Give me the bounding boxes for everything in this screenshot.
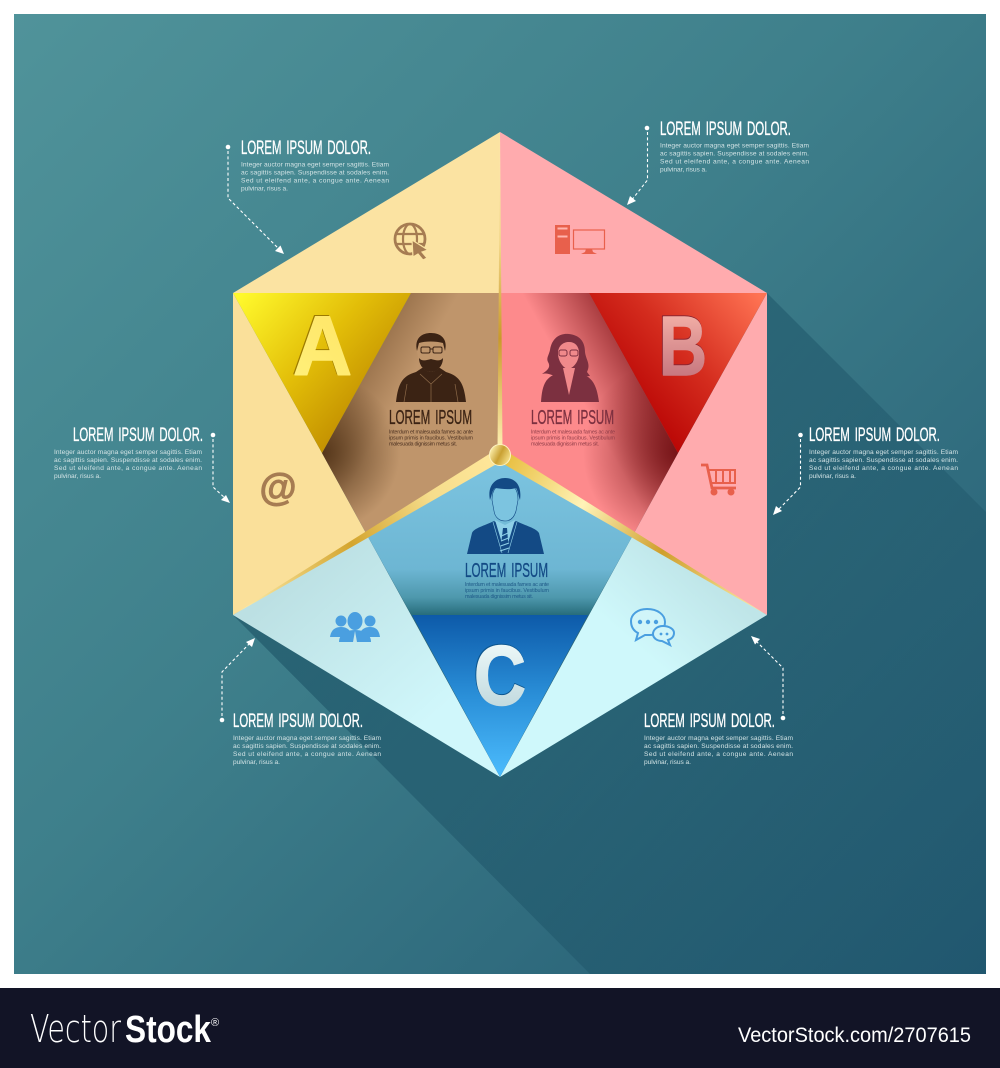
callout: middle right [773, 424, 958, 515]
callout: top right: Integer auctor magna eget semper sagittis. Etiam [660, 142, 810, 150]
panel: segment C [233, 458, 767, 777]
text block C: ipsum primis in faucibus. Vestibulum [465, 588, 550, 594]
callout: bottom right: Integer auctor magna eget semper sagittis. Etiam [644, 735, 794, 742]
callout: top right: pulvinar, risus a. [660, 166, 707, 174]
footer logo: Vector: Vector [30, 1007, 121, 1051]
callout: bottom right: LOREM IPSUM DOLOR. [644, 710, 775, 732]
icon: man with glasses and beard [396, 333, 466, 402]
panel: segment B [500, 132, 767, 615]
callout: top left [226, 137, 390, 254]
footer logo: Stock: Stock [125, 1009, 212, 1051]
letter C: C [473, 628, 526, 722]
callout: middle right: pulvinar, risus a. [809, 473, 856, 480]
callout: bottom right [644, 636, 794, 766]
callout: middle left: ac sagittis sapien. Suspendisse at sodales enim. [54, 457, 202, 464]
footer bar [0, 988, 1000, 1068]
callout: bottom right: ac sagittis sapien. Suspendisse at sodales enim. [644, 743, 793, 750]
text block C [465, 582, 550, 600]
callout: middle left: Sed ut eleifend ante, a congue ante. Aenean [54, 465, 202, 472]
heading: Lorem Ipsum B: LOREM IPSUM [531, 406, 614, 429]
letter C: C [474, 628, 526, 722]
callout: bottom right: Sed ut eleifend ante, a congue ante. Aenean [644, 751, 793, 758]
text block A [389, 430, 474, 448]
callout: bottom left [220, 638, 382, 766]
callout: bottom left: LOREM IPSUM DOLOR. [233, 710, 363, 732]
text block A: malesuada dignissim metus sit. [389, 442, 457, 448]
icon: group of people [330, 612, 380, 642]
text block B [531, 430, 616, 448]
callout: middle left: pulvinar, risus a. [54, 473, 101, 480]
icon: at sign: @ [259, 467, 297, 509]
heading: Lorem Ipsum A: LOREM IPSUM [389, 406, 472, 429]
text block A: Interdum et malesuada fames ac ante [389, 430, 473, 436]
callout: bottom left: ac sagittis sapien. Suspendisse at sodales enim. [233, 743, 381, 750]
heading: Lorem Ipsum C: LOREM IPSUM [465, 559, 548, 582]
callout: bottom right: pulvinar, risus a. [644, 759, 691, 766]
callout: top left: ac sagittis sapien. Suspendisse at sodales enim. [241, 170, 389, 176]
text block A: ipsum primis in faucibus. Vestibulum [389, 436, 474, 442]
registered mark: ® [211, 1017, 219, 1029]
callout: bottom left: Integer auctor magna eget semper sagittis. Etiam [233, 735, 382, 742]
icon: woman with glasses [541, 334, 599, 402]
callout: middle left: LOREM IPSUM DOLOR. [73, 424, 203, 446]
callout: top right: LOREM IPSUM DOLOR. [660, 118, 791, 140]
icon: shopping cart [701, 465, 736, 496]
callout: middle right: Sed ut eleifend ante, a congue ante. Aenean [809, 465, 958, 472]
icon: desktop computer [555, 225, 604, 254]
gold dividers and centre pin [233, 132, 767, 615]
callout: top left: Sed ut eleifend ante, a congue ante. Aenean [241, 178, 389, 184]
callout: top right: Sed ut eleifend ante, a congue ante. Aenean [660, 158, 809, 166]
footer image id: VectorStock.com/2707615 [738, 1023, 971, 1047]
letter A: A [292, 298, 351, 392]
letter B: B [659, 299, 707, 393]
text block C: malesuada dignissim metus sit. [465, 594, 533, 600]
callout: middle right: Integer auctor magna eget semper sagittis. Etiam [809, 449, 958, 456]
callout: bottom left: pulvinar, risus a. [233, 759, 280, 766]
callout: top right: ac sagittis sapien. Suspendisse at sodales enim. [660, 150, 809, 158]
callout: middle left [54, 424, 230, 503]
letter A: A [293, 299, 352, 393]
icon: chat bubbles [631, 609, 674, 645]
text block C: Interdum et malesuada fames ac ante [465, 582, 549, 588]
callout: top left: LOREM IPSUM DOLOR. [241, 137, 371, 159]
panel: segment A [233, 132, 500, 615]
callout: top right [627, 118, 810, 205]
callout: top left: pulvinar, risus a. [241, 186, 288, 192]
long shadow of hexagon [233, 293, 986, 974]
callout: bottom left: Sed ut eleifend ante, a congue ante. Aenean [233, 751, 381, 758]
callout: top left: Integer auctor magna eget semper sagittis. Etiam [241, 162, 390, 168]
text block B: Interdum et malesuada fames ac ante [531, 430, 615, 436]
callout: middle left: Integer auctor magna eget semper sagittis. Etiam [54, 449, 202, 456]
text block B: ipsum primis in faucibus. Vestibulum [531, 436, 616, 442]
letter B: B [658, 298, 707, 392]
text block B: malesuada dignissim metus sit. [531, 442, 599, 448]
icon: globe with cursor [395, 224, 428, 260]
icon: businessman [467, 478, 544, 554]
callout: middle right: ac sagittis sapien. Suspendisse at sodales enim. [809, 457, 958, 464]
